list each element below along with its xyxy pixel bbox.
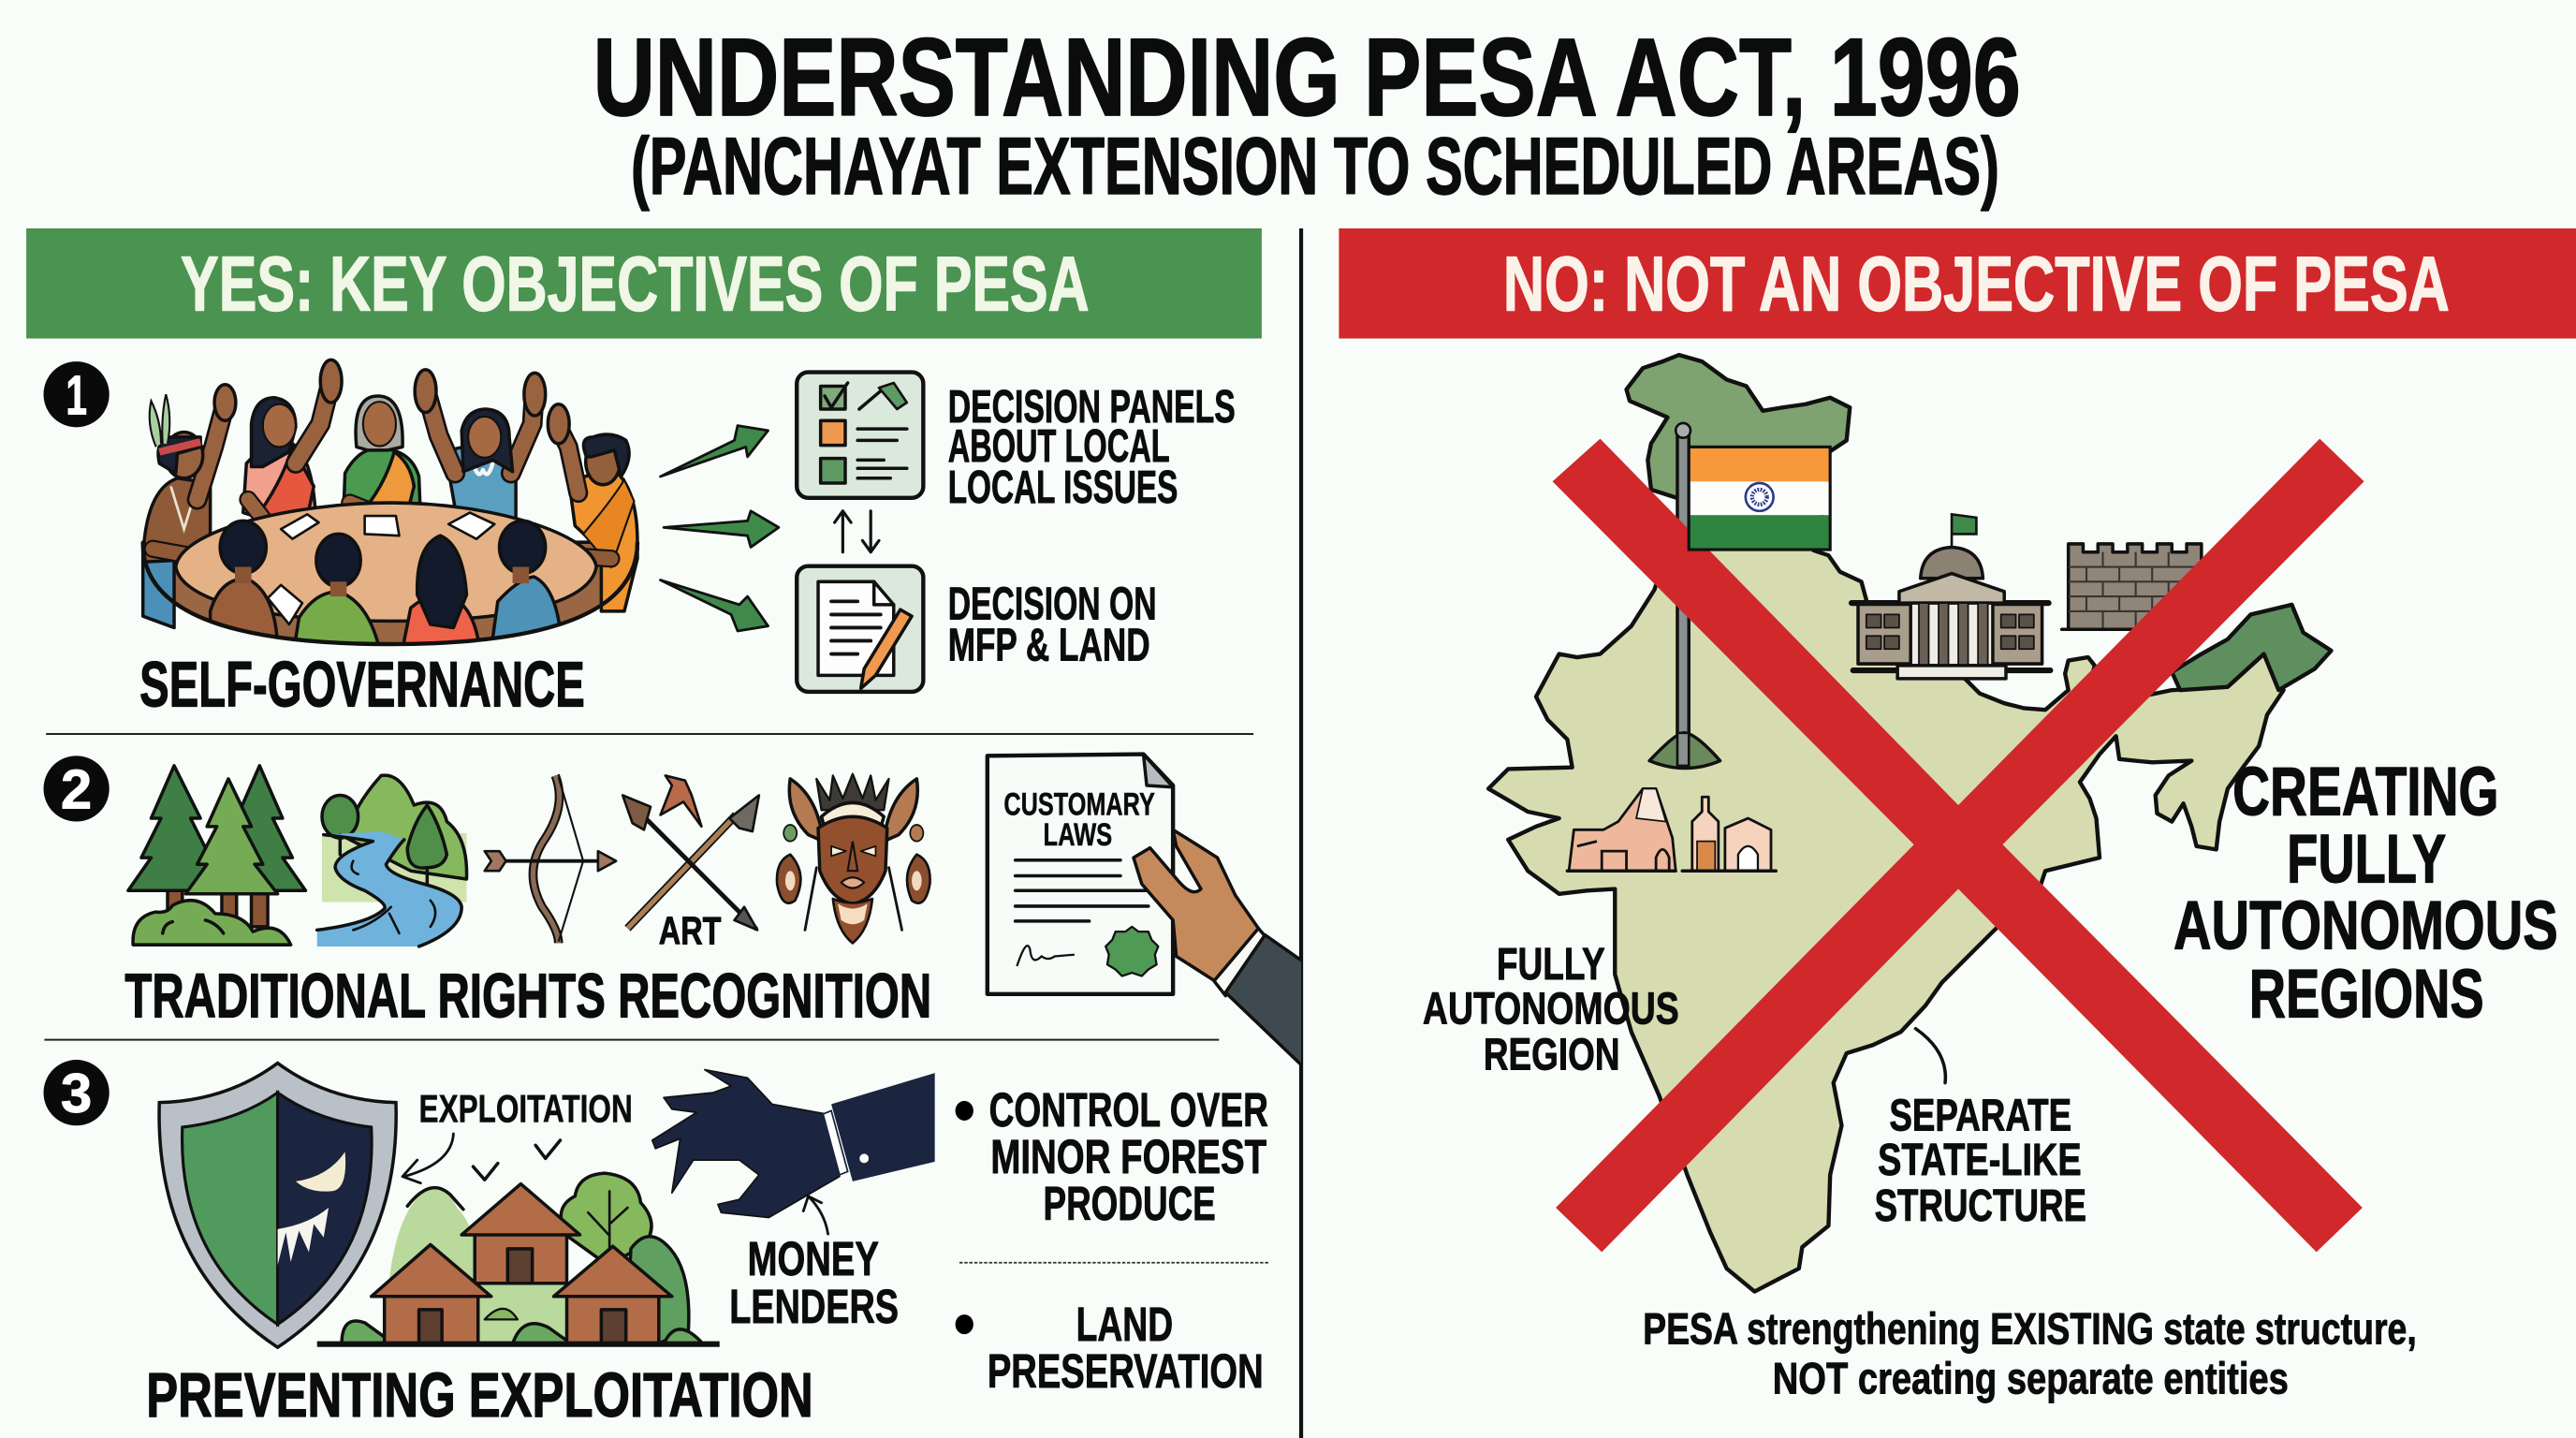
text: decision panels <box>948 382 1236 513</box>
bullets: control and preservation <box>956 1083 1268 1398</box>
label: money lenders with arrow: MONEY <box>748 1232 879 1285</box>
arrows: up and down exchange <box>835 511 879 552</box>
number badge 1: 1 <box>66 363 87 426</box>
text: decision panels: ABOUT LOCAL <box>948 421 1170 472</box>
arrow: lower green <box>661 580 768 631</box>
callout: creating fully autonomous regions: FULLY <box>2287 819 2446 897</box>
round table with papers <box>176 503 596 621</box>
elder woman in green and orange <box>344 396 420 526</box>
number badge 3 <box>44 1060 110 1125</box>
arrow: middle green <box>664 511 779 547</box>
panel: traditional rights recognition <box>44 755 1314 1084</box>
text: decision panels: LOCAL ISSUES <box>948 462 1178 513</box>
text block: bottom note: NOT creating separate entities <box>1773 1354 2289 1403</box>
heading: preventing exploitation: PREVENTING EXPLOITATION <box>146 1361 813 1431</box>
label: separate state-like structure: SEPARATE <box>1889 1091 2071 1141</box>
callout: creating fully autonomous regions <box>2174 753 2558 1032</box>
icon: small regional buildings <box>1567 788 1776 871</box>
icon: river and hills <box>317 775 467 946</box>
icon: crossed spears <box>622 775 759 952</box>
icon: brick wall <box>2062 544 2202 629</box>
bullets: control and preservation: PRODUCE <box>1043 1177 1216 1230</box>
icon: checklist panel <box>797 373 923 498</box>
bullets: control and preservation: LAND <box>1076 1298 1173 1351</box>
icon: tribal mask <box>777 774 930 943</box>
panel: not an objective <box>1423 355 2558 1403</box>
number badge 3: 3 <box>61 1062 92 1124</box>
icon: document and pencil panel <box>797 566 923 692</box>
label: exploitation with arrow <box>402 1088 633 1183</box>
icon: government building <box>1852 514 2050 679</box>
icon: shield with menacing face <box>159 1064 396 1347</box>
heading: yes key objectives <box>26 228 1262 339</box>
label: separate state-like structure: STRUCTURE <box>1875 1181 2086 1231</box>
heading: traditional rights recognition: TRADITIONAL RIGHTS RECOGNITION <box>124 961 931 1031</box>
woman in red sari <box>243 360 342 552</box>
label: exploitation with arrow: EXPLOITATION <box>419 1088 633 1131</box>
number badge 2 <box>44 756 110 822</box>
label: separate state-like structure: STATE-LIKE <box>1878 1135 2082 1185</box>
label: money lenders with arrow <box>729 1196 899 1333</box>
title <box>593 16 2021 212</box>
number badge 1 <box>44 361 110 427</box>
heading: no not an objective <box>1339 228 2576 339</box>
icon: customary laws document held by hand: CUSTOMARY <box>1003 787 1155 823</box>
icon: village with huts and trees <box>317 1140 720 1344</box>
label: separate state-like structure <box>1875 1029 2086 1231</box>
label: fully autonomous region <box>1423 939 1679 1080</box>
icon: forest <box>128 766 305 945</box>
bullets: control and preservation: MINOR FOREST <box>990 1130 1266 1183</box>
icon: indian flag <box>1689 447 1830 550</box>
heading: self-governance: SELF-GOVERNANCE <box>139 649 585 721</box>
label: money lenders with arrow: LENDERS <box>729 1280 899 1333</box>
seated people seen from behind <box>211 521 562 649</box>
icon: money lender hand <box>652 1070 935 1218</box>
text: decision on MFP and land: MFP & LAND <box>948 621 1150 671</box>
text: decision on MFP and land: DECISION ON <box>948 580 1157 630</box>
panel: preventing exploitation <box>44 1060 1268 1431</box>
icon: villagers around a table <box>143 360 637 649</box>
label: fully autonomous region: AUTONOMOUS <box>1423 983 1679 1034</box>
label: fully autonomous region: FULLY <box>1497 939 1605 990</box>
person with headband <box>143 385 236 627</box>
title: UNDERSTANDING PESA ACT, 1996 <box>593 16 2021 139</box>
person in orange <box>548 404 637 611</box>
icon: crossed spears: ART <box>659 908 722 952</box>
panel: self-governance <box>44 360 1236 721</box>
text block: bottom note <box>1643 1305 2417 1403</box>
title: (PANCHAYAT EXTENSION TO SCHEDULED AREAS) <box>631 122 1999 212</box>
icon: customary laws document held by hand: LAWS <box>1043 817 1112 853</box>
text: decision panels: DECISION PANELS <box>948 382 1236 433</box>
callout: creating fully autonomous regions: REGIONS <box>2249 954 2484 1032</box>
heading: yes key objectives: YES: KEY OBJECTIVES OF PESA <box>181 242 1090 328</box>
bullets: control and preservation: CONTROL OVER <box>989 1083 1268 1137</box>
number badge 2: 2 <box>61 758 92 821</box>
label: fully autonomous region: REGION <box>1484 1030 1620 1080</box>
icon: flagpole <box>1649 423 1720 769</box>
icon: customary laws document held by hand <box>988 755 1314 1084</box>
woman in blue <box>415 370 546 522</box>
map of India <box>1488 355 2331 1292</box>
text: decision on MFP and land <box>948 580 1157 671</box>
bullets: control and preservation: PRESERVATION <box>988 1344 1264 1398</box>
icon: bow and arrow <box>485 775 616 943</box>
arrow: upper green <box>661 426 768 477</box>
icon: red cross <box>1553 439 2364 1252</box>
